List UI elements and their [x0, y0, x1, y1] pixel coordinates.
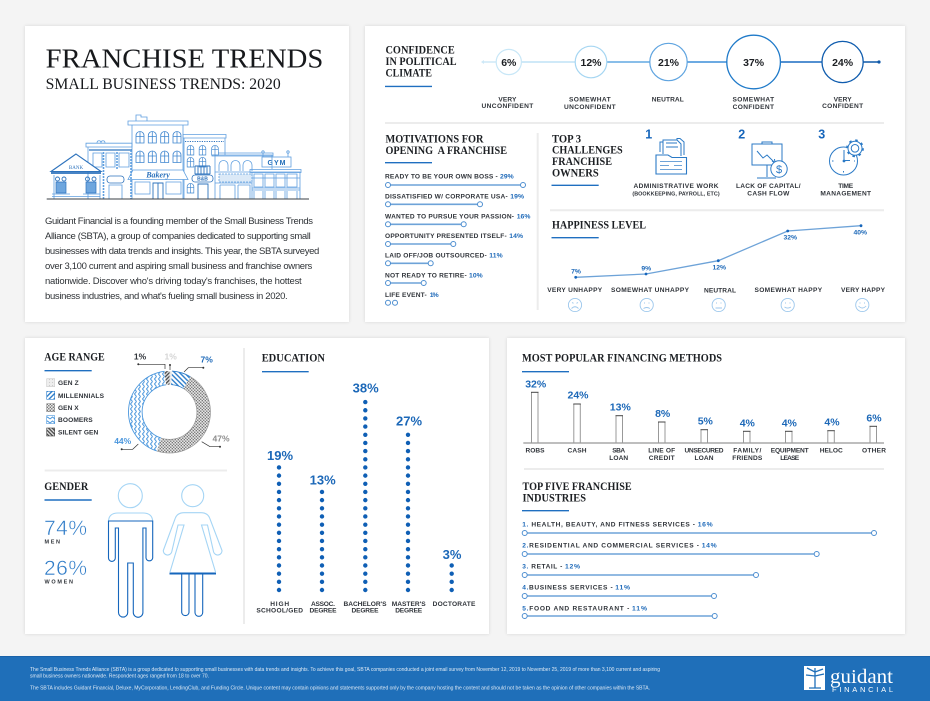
chart: age donut	[114, 351, 230, 453]
bar: other	[862, 412, 886, 454]
bar: robs: ROBS	[526, 447, 545, 454]
intro paragraph: over 3,100 current and aspiring small business and franchise owners	[45, 261, 313, 272]
leader: boomers: 44%	[114, 436, 132, 446]
row	[522, 605, 717, 618]
scale labels: VERY	[498, 96, 517, 104]
subtitle: SMALL BUSINESS TRENDS: 2020	[46, 76, 281, 93]
chart: confidence scale	[481, 35, 881, 111]
footer	[0, 656, 930, 701]
bar: equipment lease: 4%	[782, 417, 798, 429]
row	[522, 563, 758, 578]
row: LIFE EVENT-	[385, 292, 427, 299]
scale labels: SOMEWHAT	[569, 96, 611, 104]
row: 4.BUSINESS SERVICES -	[522, 584, 613, 591]
heading: gender: GENDER	[44, 481, 89, 493]
column: master	[392, 413, 426, 615]
bar: family and friends: 4%	[740, 417, 756, 429]
stat: women: WOMEN	[44, 580, 73, 586]
bar: equipment lease: LEASE	[780, 455, 800, 462]
intro paragraph: businesses with data trends and insights. This year, the SBTA surveyed	[45, 246, 319, 257]
circle 12%	[575, 46, 607, 78]
leader: gen x: 47%	[212, 434, 230, 444]
row	[385, 174, 526, 188]
bar: robs: 32%	[525, 378, 547, 390]
bar: equipment lease	[771, 417, 809, 462]
happiness categories: VERY UNHAPPY	[547, 287, 603, 294]
heading: confidence: CLIMATE	[386, 68, 432, 80]
bar: family and friends: FAMILY/	[733, 447, 761, 454]
heading: top 3 challenges: OWNERS	[552, 167, 599, 179]
challenge 3	[818, 127, 871, 197]
legend: age range: GEN X	[58, 405, 79, 412]
ground line	[47, 198, 309, 200]
row: 11%	[632, 605, 647, 612]
icon: folder	[656, 138, 686, 174]
happiness categories	[547, 287, 886, 294]
heading: top 3 challenges: CHALLENGES	[552, 145, 623, 157]
heading: motivations: MOTIVATIONS FOR	[386, 133, 484, 145]
intro paragraph: business industries, and what's fueling small business in 2020.	[45, 291, 288, 302]
column: master: 27%	[396, 413, 422, 428]
column: doctorate: DOCTORATE	[433, 601, 476, 608]
leader: millennials: 7%	[201, 355, 213, 365]
row	[385, 233, 523, 246]
row: 1%	[430, 292, 439, 299]
row: 2.RESIDENTIAL AND COMMERCIAL SERVICES -	[522, 542, 699, 549]
row: 29%	[500, 174, 514, 181]
challenge 1	[632, 127, 720, 197]
icon: presentation board with dollar: $	[776, 164, 782, 176]
challenge 2: CASH FLOW	[747, 190, 790, 197]
column: bachelor: BACHELOR'S	[344, 601, 387, 608]
icons: faces	[568, 298, 869, 312]
row: OPPORTUNITY PRESENTED ITSELF-	[385, 233, 507, 240]
heading: top five industries: INDUSTRIES	[522, 492, 586, 504]
heading: financing: MOST POPULAR FINANCING METHODS	[522, 353, 722, 365]
row: 5.FOOD AND RESTAURANT -	[522, 605, 629, 612]
circle 6%	[496, 49, 521, 75]
footer text: The Small Business Trends Alliance (SBTA) is a group dedicated to supporting small businesses with data trends and insights. To achieve this goal, SBTA companies conducted a joint email survey from November 12, 2019 to November 25, 2019 of more than 3,100 current and aspiring	[30, 667, 660, 673]
row: 14%	[702, 542, 717, 549]
row: 1. HEALTH, BEAUTY, AND FITNESS SERVICES -	[522, 521, 695, 528]
illustration: storefront buildings: B&B	[197, 177, 208, 183]
challenge 1: ADMINISTRATIVE WORK	[634, 183, 719, 190]
scale labels	[482, 96, 863, 111]
gym	[250, 170, 301, 199]
challenge 2	[736, 127, 801, 197]
panel: financing and industries	[507, 338, 905, 634]
legend: age range: GEN Z	[58, 380, 79, 387]
row: 12%	[565, 563, 580, 570]
bar: sba loan: 13%	[610, 402, 631, 414]
happiness categories: VERY HAPPY	[841, 287, 886, 294]
heading: confidence	[385, 44, 457, 86]
chart: happiness line: 7%	[571, 268, 581, 275]
happiness categories: NEUTRAL	[704, 288, 736, 294]
panel: intro	[25, 26, 349, 322]
heading: education	[262, 353, 326, 372]
icon: female figure	[163, 485, 222, 616]
bar: line of credit: CREDIT	[649, 455, 675, 462]
footer text: small business owners nationwide. Respondent ages ranged from 18 to over 70.	[30, 674, 209, 680]
bar: line of credit: 8%	[655, 408, 671, 420]
row: 14%	[509, 233, 523, 240]
column: bachelor: 38%	[353, 381, 379, 396]
row: LAID OFF/JOB OUTSOURCED-	[385, 253, 487, 260]
footer text: The SBTA includes Guidant Financial, Deluxe, MyCorporation, LendingClub, and Funding Circle. Unique content may contain opinions and statements supported only by the company hosting the content and should not be taken as the opinion of other companies within the SBTA.	[30, 686, 650, 692]
scale labels: UNCONFIDENT	[564, 104, 616, 111]
chart: financing bars	[523, 378, 886, 462]
stat: men: MEN	[44, 540, 60, 546]
challenge 3: TIME	[838, 183, 854, 190]
icon: clock and gear	[830, 140, 863, 175]
bar: line of credit: LINE OF	[648, 447, 675, 454]
chart: happiness line: 32%	[783, 235, 797, 242]
illustration: storefront buildings: Bakery	[145, 170, 170, 180]
circle 24%	[822, 41, 863, 83]
bar: cash	[567, 390, 589, 454]
b and b	[183, 134, 226, 199]
legend: age range: BOOMERS	[58, 417, 93, 424]
circle 21%	[650, 43, 687, 81]
row: DISSATISFIED W/ CORPORATE USA-	[385, 193, 508, 200]
bar: unsecured loan	[684, 415, 724, 462]
stat: women: 26%	[44, 557, 87, 580]
heading: motivations	[385, 133, 507, 163]
row	[522, 542, 819, 556]
bar: other: OTHER	[862, 447, 886, 454]
circle 12%: 12%	[580, 57, 602, 69]
shop	[212, 153, 273, 199]
footer text	[30, 667, 660, 692]
row: 11%	[489, 253, 503, 260]
logo: guidant financial: FINANCIAL	[832, 685, 893, 694]
heading: happiness level: HAPPINESS LEVEL	[552, 219, 646, 231]
heading: motivations: OPENING A FRANCHISE	[386, 145, 507, 157]
happiness categories: SOMEWHAT UNHAPPY	[611, 287, 690, 294]
bar: sba loan: LOAN	[609, 455, 628, 462]
column: high school: HIGH	[270, 601, 289, 608]
row: 11%	[615, 584, 630, 591]
row: NOT READY TO RETIRE-	[385, 272, 467, 279]
circle 37%	[727, 35, 780, 89]
row: 10%	[469, 272, 483, 279]
column: doctorate	[433, 547, 476, 608]
intro paragraph: Guidant Financial is a founding member of the Small Business Trends	[45, 216, 313, 227]
bar: equipment lease: EQUIPMENT	[771, 447, 809, 454]
bar: sba loan: SBA	[612, 447, 625, 454]
bar: family and friends	[732, 417, 763, 462]
row: READY TO BE YOUR OWN BOSS -	[385, 174, 498, 181]
circle 24%: 24%	[832, 57, 854, 69]
bar: heloc: HELOC	[820, 447, 843, 454]
bar: heloc	[820, 416, 843, 454]
column: master: DEGREE	[395, 608, 423, 615]
scale labels: UNCONFIDENT	[482, 103, 533, 110]
circle 21%: 21%	[658, 57, 680, 69]
challenge 3: MANAGEMENT	[820, 190, 871, 197]
column: high school: SCHOOL/GED	[256, 608, 303, 615]
heading: age range: AGE RANGE	[44, 352, 105, 364]
column: doctorate: 3%	[443, 547, 462, 562]
row	[385, 193, 524, 207]
challenge 2: 2	[738, 127, 745, 141]
scale labels: CONFIDENT	[733, 104, 774, 111]
heading: top 3 challenges	[552, 133, 623, 185]
bank	[51, 154, 101, 172]
list: industries	[522, 521, 876, 618]
bar: cash: 24%	[567, 390, 589, 402]
bar: heloc: 4%	[824, 416, 840, 428]
column: bachelor	[344, 381, 387, 615]
column: master: MASTER'S	[392, 601, 426, 608]
bar: line of credit	[648, 408, 675, 462]
panel: confidence, motivations, challenges, happiness	[365, 26, 905, 322]
heading: top 3 challenges: TOP 3	[552, 133, 581, 145]
heading: gender	[44, 481, 92, 500]
row	[522, 584, 716, 598]
logo: guidant financial: guidant	[830, 666, 893, 688]
row: 3. RETAIL -	[522, 563, 562, 570]
column: high school: 19%	[267, 448, 293, 463]
challenge 2: LACK OF CAPITAL/	[736, 183, 801, 190]
bar: other: 6%	[866, 412, 882, 424]
illustration: storefront buildings: BANK	[69, 166, 83, 171]
circle 37%: 37%	[743, 57, 765, 69]
heading: confidence: IN POLITICAL	[386, 56, 457, 68]
bar: unsecured loan: LOAN	[694, 455, 714, 462]
building two	[86, 141, 132, 199]
main bakery building	[128, 115, 188, 199]
list: motivations	[385, 174, 530, 305]
heading: confidence: CONFIDENCE	[386, 44, 455, 56]
intro paragraph	[45, 216, 319, 302]
panel: demographics	[25, 338, 489, 634]
heading: top 3 challenges: FRANCHISE	[552, 156, 612, 168]
heading: happiness level	[552, 219, 646, 238]
scale labels: NEUTRAL	[652, 96, 684, 104]
stat: men: 74%	[44, 517, 87, 540]
row	[385, 213, 530, 227]
row	[385, 253, 503, 266]
row: 16%	[517, 213, 530, 220]
chart: happiness line: 9%	[641, 265, 651, 272]
heading: top five industries	[522, 481, 632, 511]
scale labels: CONFIDENT	[822, 103, 863, 110]
row	[522, 521, 876, 536]
chart: education dot columns	[256, 381, 476, 615]
bar: unsecured loan: 5%	[698, 415, 714, 427]
bar: unsecured loan: UNSECURED	[684, 447, 724, 454]
bar: family and friends: FRIENDS	[732, 455, 763, 462]
bar: robs	[525, 378, 547, 454]
challenge 1: (BOOKKEEPING, PAYROLL, ETC)	[632, 191, 720, 197]
row: WANTED TO PURSUE YOUR PASSION-	[385, 213, 514, 220]
scale labels: SOMEWHAT	[732, 96, 774, 104]
row: 16%	[698, 521, 713, 528]
leader: silent gen: 1%	[134, 351, 147, 361]
illustration: storefront buildings	[47, 115, 309, 199]
column: high school	[256, 448, 303, 615]
legend: age range: MILLENNIALS	[58, 393, 105, 400]
icon: male figure	[108, 484, 153, 617]
chart: happiness line	[571, 224, 867, 279]
illustration: storefront buildings: GYM	[268, 160, 286, 167]
heading: top five industries: TOP FIVE FRANCHISE	[522, 481, 632, 493]
legend: age range: SILENT GEN	[58, 430, 99, 436]
scale labels: VERY	[834, 96, 852, 104]
column: associate: DEGREE	[310, 608, 337, 615]
legend: age range	[47, 379, 105, 436]
column: associate: ASSOC.	[311, 601, 335, 608]
bar: cash: CASH	[568, 447, 587, 454]
intro paragraph: Alliance (SBTA), a group of companies dedicated to supporting small	[45, 231, 311, 242]
logo: guidant financial	[804, 666, 893, 694]
chart: happiness line: 40%	[853, 229, 867, 236]
happiness categories: SOMEWHAT HAPPY	[754, 287, 823, 294]
heading: education: EDUCATION	[262, 353, 326, 365]
row	[385, 292, 439, 305]
bar: sba loan	[609, 402, 631, 462]
row	[385, 272, 483, 286]
chart: happiness line: 12%	[712, 265, 726, 272]
challenge 1: 1	[645, 127, 652, 141]
heading: age range	[44, 352, 105, 371]
column: associate	[310, 472, 337, 615]
row: 19%	[510, 193, 524, 200]
intro paragraph: nationwide. Discover who's driving today's franchises, the hottest	[45, 276, 302, 287]
challenge 3: 3	[818, 127, 825, 141]
leader: gen z: 1%	[165, 351, 177, 361]
column: associate: 13%	[310, 472, 336, 487]
circle 6%: 6%	[501, 57, 517, 69]
column: bachelor: DEGREE	[352, 608, 379, 615]
title: FRANCHISE TRENDS	[46, 43, 323, 74]
